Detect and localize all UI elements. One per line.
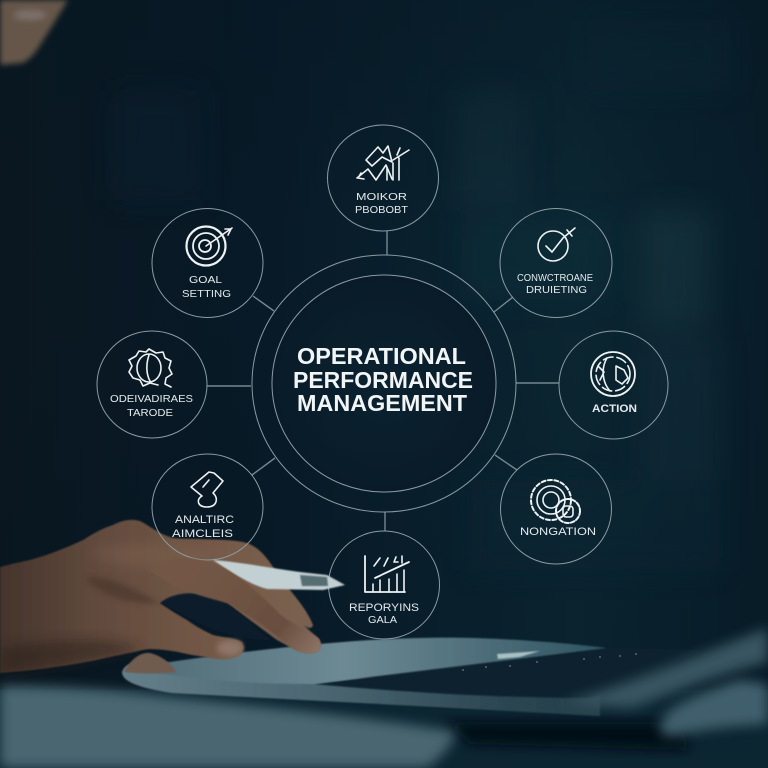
keyboard	[314, 648, 700, 698]
laptop base front edge	[122, 663, 600, 716]
finger gap shading	[160, 593, 270, 640]
pen and index finger over the pen	[150, 558, 345, 653]
node: goal setting	[152, 208, 263, 318]
node: lower left: AIMCLEIS	[172, 528, 233, 540]
icon: bar chart	[365, 556, 409, 592]
pen metal tip	[300, 575, 328, 586]
desk floor	[0, 690, 768, 768]
laptop and desk	[0, 628, 768, 768]
node: lower left	[152, 454, 263, 560]
thumb on the trackpad	[124, 653, 176, 674]
hand	[0, 520, 321, 674]
icon: gears	[531, 480, 580, 523]
keyboard specks	[462, 653, 637, 671]
icon: flask	[191, 472, 223, 507]
palm shading	[0, 640, 140, 673]
node: top: PBOBOBT	[355, 204, 409, 216]
highlight on trackpad edge	[497, 651, 540, 659]
node: upper right	[500, 208, 612, 318]
node: lower left: ANALTIRC	[175, 514, 234, 526]
knuckle crease shadow	[85, 577, 160, 603]
node: left	[97, 331, 207, 438]
icon: target	[186, 226, 232, 266]
central hub: MANAGEMENT	[297, 390, 467, 416]
icon: check mark	[538, 228, 575, 261]
right blurred laptop bands	[560, 628, 768, 708]
node: lower right	[500, 454, 612, 564]
node: lower right: NONGATION	[520, 526, 596, 538]
node: left: ODEIVADIRAES	[110, 393, 193, 405]
blurred paper on desk	[0, 686, 456, 768]
back of hand and fingers	[0, 520, 321, 673]
pen body	[213, 560, 345, 590]
third fingertip	[217, 640, 243, 656]
node: goal setting: GOAL	[189, 274, 222, 286]
node: top: MOIKOR	[356, 191, 407, 203]
icon: trend chart	[357, 146, 409, 180]
node: goal setting: SETTING	[182, 288, 231, 300]
node: action	[559, 331, 668, 439]
node: left: TARODE	[127, 407, 173, 419]
node: reporting: REPORYINS	[349, 602, 419, 614]
node: reporting: GALA	[368, 614, 397, 626]
icon: gear	[129, 349, 172, 387]
icon: globe	[591, 352, 635, 396]
central hub: PERFORMANCE	[293, 367, 473, 393]
connector lines	[207, 231, 559, 531]
index finger	[150, 558, 321, 653]
central hub	[252, 255, 516, 512]
node: upper right: DRUIETING	[526, 284, 587, 296]
person's chin at top-left corner	[0, 0, 68, 65]
node: reporting	[328, 531, 440, 639]
node: upper right: CONWCTROANE	[517, 272, 593, 284]
node: top	[328, 125, 438, 231]
highlight along back of hand	[90, 543, 230, 568]
trackpad surface	[130, 638, 607, 684]
node: action: ACTION	[592, 403, 637, 415]
shadow under laptop	[445, 722, 690, 750]
title: OPERATIONAL	[297, 343, 466, 369]
